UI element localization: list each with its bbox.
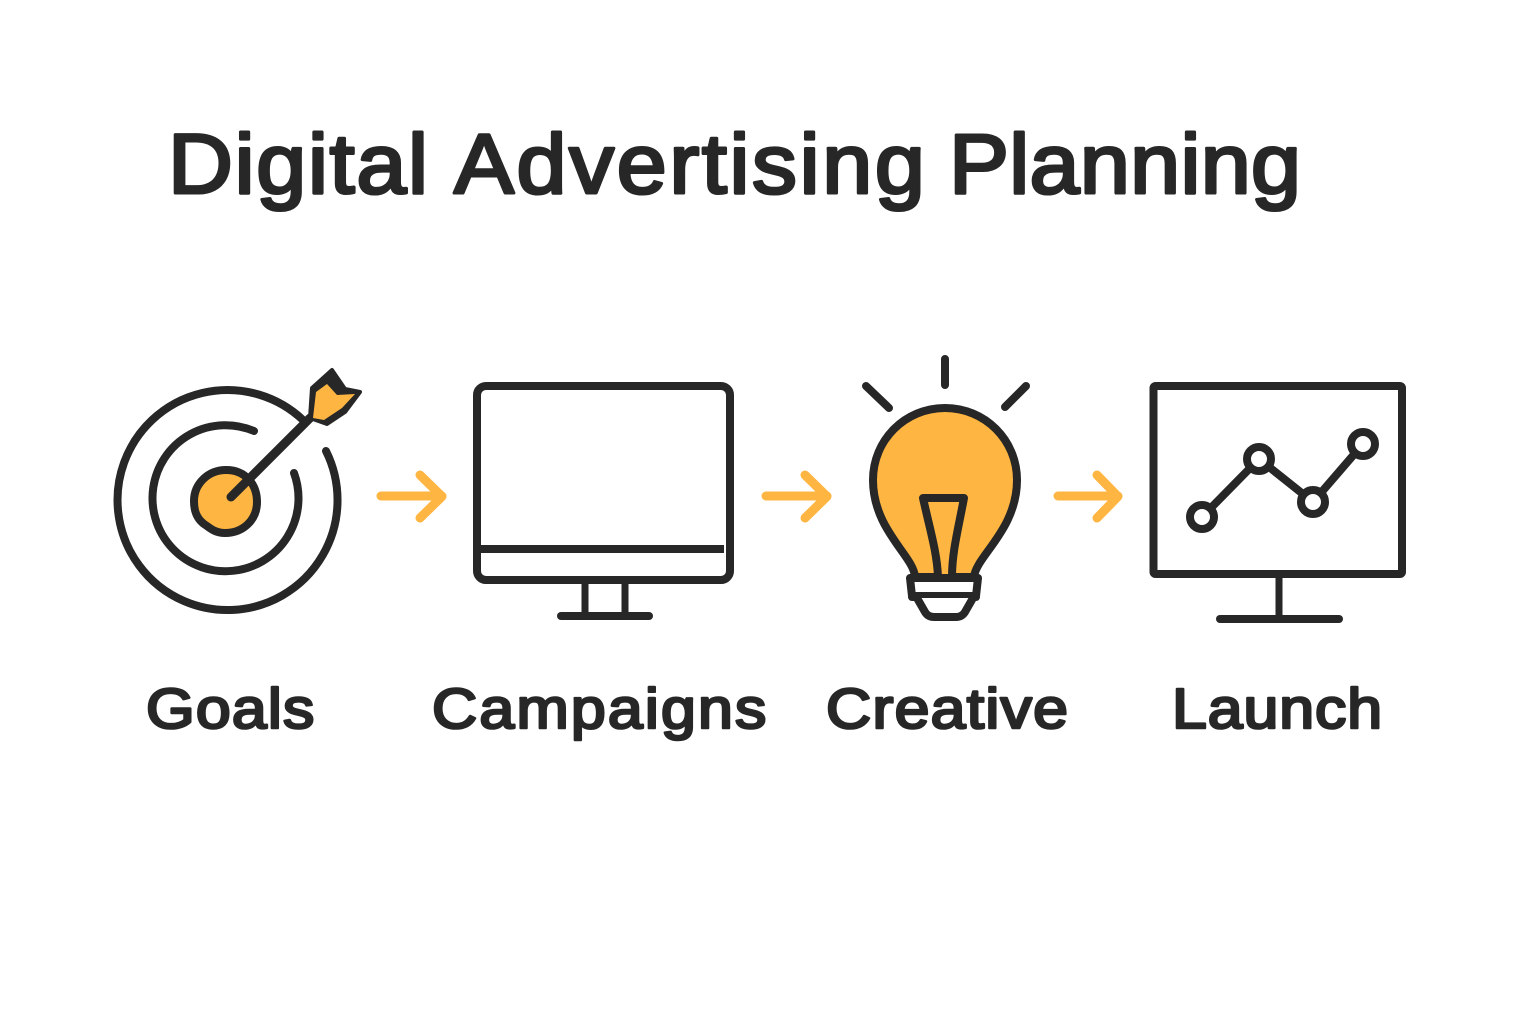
labels: Launch: [1172, 677, 1382, 740]
labels: [146, 677, 1382, 740]
icon: blank monitor: [477, 386, 730, 616]
arrow: goals to campaigns: [381, 475, 442, 518]
labels: Goals: [146, 677, 314, 740]
title: Digital: [168, 118, 428, 211]
icon: light bulb: [866, 359, 1026, 617]
title: Advertising: [454, 118, 925, 211]
title: Planning: [949, 118, 1301, 211]
arrow: creative to launch: [1058, 475, 1118, 518]
icon: target with arrow: [118, 370, 360, 610]
labels: Campaigns: [432, 677, 766, 740]
labels: Creative: [826, 677, 1068, 740]
arrow: campaigns to creative: [766, 475, 827, 518]
icon: monitor with line chart: [1154, 386, 1402, 619]
title: [168, 118, 1301, 211]
